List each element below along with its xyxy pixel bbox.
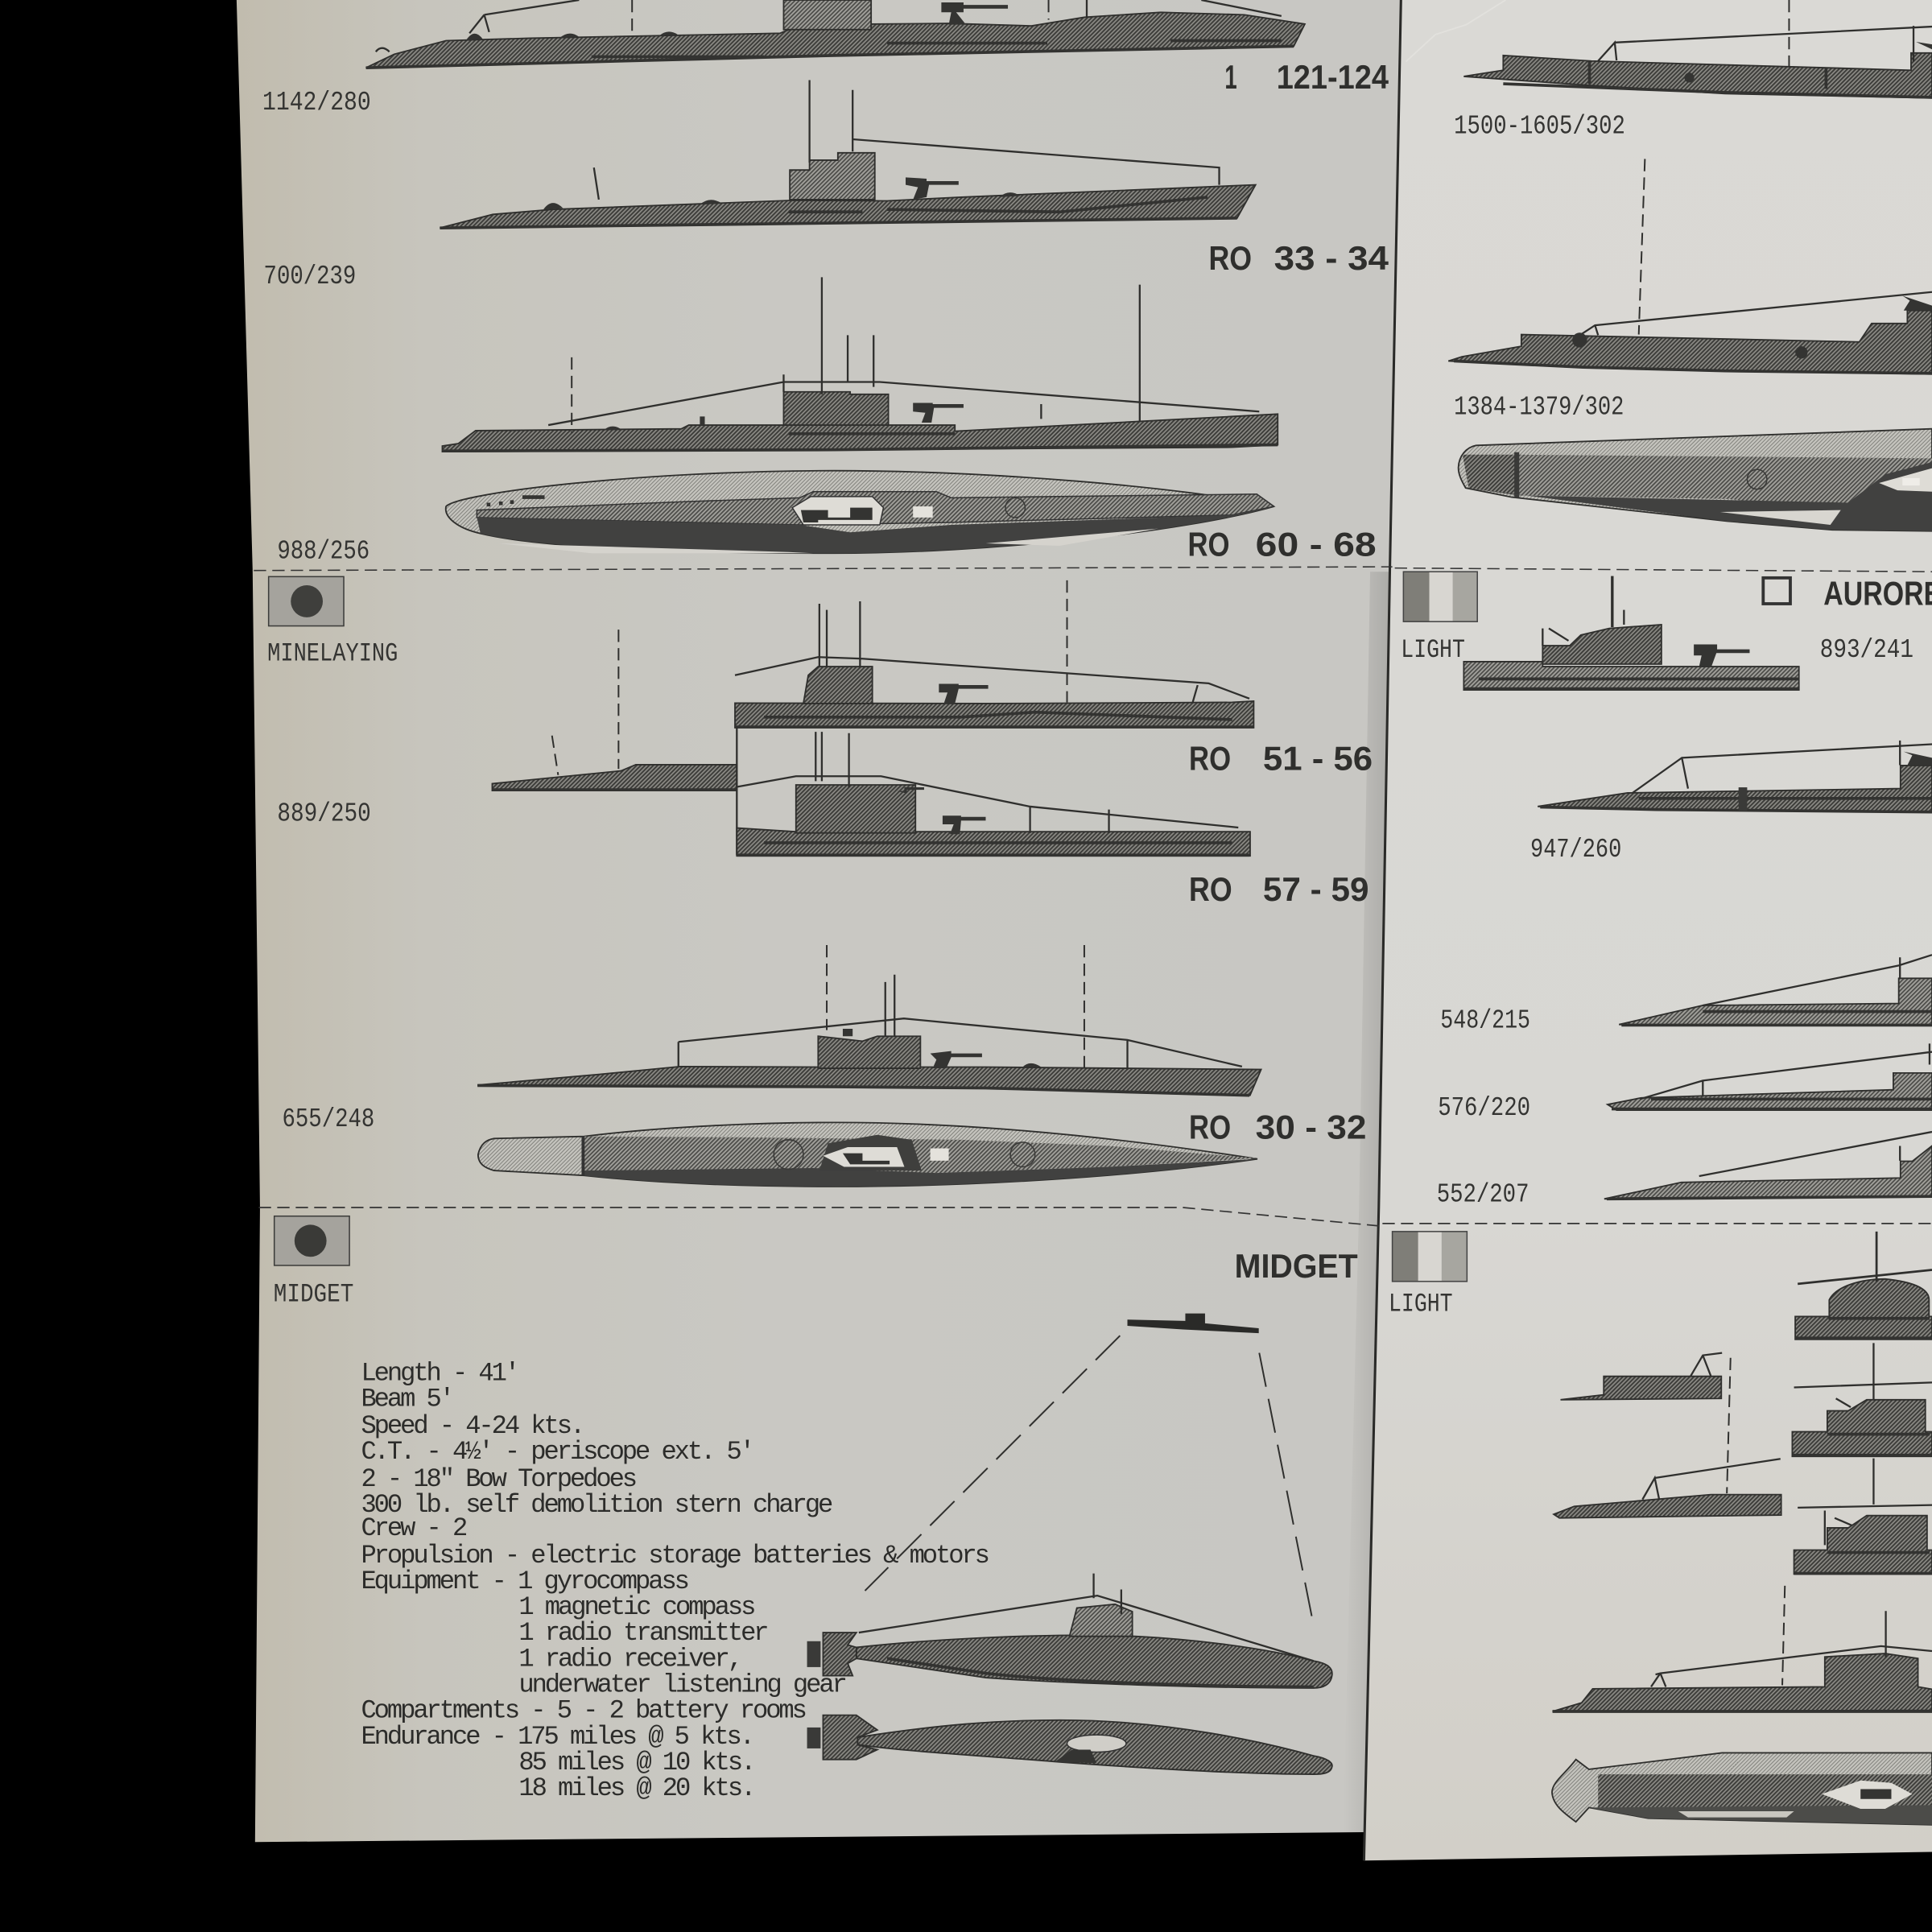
panel: minelaying xyxy=(267,576,1373,1187)
bow section B xyxy=(1554,1459,1781,1518)
bow section A xyxy=(1561,1353,1722,1400)
submarine: plan view xyxy=(1552,1752,1932,1825)
specification text block: 85 miles @ 10 kts. xyxy=(518,1748,753,1777)
specification text block: 300 lb. self demolition stern charge xyxy=(361,1490,832,1520)
class name: RO 57-59 xyxy=(1189,871,1369,908)
specification text block xyxy=(361,1358,989,1803)
class name: RO 30-32: RO xyxy=(1189,1108,1231,1146)
submarine: RO 33-34 xyxy=(440,80,1256,228)
class name: RO 30-32: 30 - 32 xyxy=(1256,1108,1366,1146)
submarine: RO 51-56 xyxy=(492,580,1253,855)
class name: RO 60-68 xyxy=(1188,526,1377,563)
specification text block: Endurance - 175 miles @ 5 kts. xyxy=(361,1722,753,1752)
class name: RO 57-59: 57 - 59 xyxy=(1263,871,1369,908)
tonnage: 893/241: 893/241 xyxy=(1820,635,1913,666)
class name: RO 51-56: 51 - 56 xyxy=(1263,741,1373,778)
marker: nationality symbol, neutral block xyxy=(1763,578,1790,604)
specification text block: underwater listening gear xyxy=(518,1670,846,1700)
specification text block: Propulsion - electric storage batteries & motors xyxy=(361,1541,989,1571)
specification text block: Equipment - 1 gyrocompass xyxy=(361,1567,688,1596)
submarine: RO 60-68 plan view xyxy=(446,471,1274,553)
submarine: 552/207 xyxy=(1604,1132,1932,1199)
class name: I 121-124 xyxy=(1224,59,1389,96)
submarine: RO 30-32 side view xyxy=(477,945,1261,1096)
heading: midget: MIDGET xyxy=(1235,1248,1358,1285)
submarine: RO 30-32 plan view xyxy=(478,1122,1257,1187)
class name: RO 60-68: RO xyxy=(1188,526,1230,563)
panel: light submarines, lower xyxy=(1389,1232,1932,1825)
category label: light: LIGHT xyxy=(1389,1290,1453,1319)
tonnage: 1500-1605/302: 1500-1605/302 xyxy=(1454,111,1625,142)
class name: RO 60-68: 60 - 68 xyxy=(1256,526,1377,563)
panel: paper left column xyxy=(237,0,1401,1842)
panel: light submarines, Italian xyxy=(1401,572,1932,1210)
fold dashed horizontal upper xyxy=(254,567,1932,572)
submarine: variant two xyxy=(1792,1343,1932,1456)
tonnage: 889/250: 889/250 xyxy=(277,799,371,829)
specification text block: Speed - 4-24 kts. xyxy=(361,1411,583,1441)
specification text block: Crew - 2 xyxy=(361,1513,466,1543)
submarine: variant one xyxy=(1795,1232,1932,1340)
tonnage: 1384-1379/302: 1384-1379/302 xyxy=(1454,392,1624,423)
submarine: RO 60-68 side view xyxy=(442,277,1278,452)
panel: midget xyxy=(274,1216,1358,1803)
panel: Japanese large submarines xyxy=(262,0,1389,567)
submarine: midget scale silhouette xyxy=(1128,1314,1259,1333)
submarine: midget side view xyxy=(807,1574,1332,1688)
tonnage: 552/207: 552/207 xyxy=(1437,1179,1529,1210)
flag: Italy xyxy=(1393,1232,1467,1282)
panel: paper right column xyxy=(1364,0,1932,1860)
class name: RO 30-32 xyxy=(1189,1108,1366,1146)
submarine: 947/260 xyxy=(1538,741,1932,812)
class name: I 121-124: 121-124 xyxy=(1277,59,1389,96)
flag: Italy xyxy=(1403,572,1477,621)
specification text block: 1 magnetic compass xyxy=(518,1592,754,1622)
fold dashed horizontal lower xyxy=(258,1208,1932,1226)
submarine: I 121-124 xyxy=(366,0,1305,68)
class name: RO 51-56: RO xyxy=(1189,741,1231,778)
submarine: plan view xyxy=(1459,429,1932,531)
tonnage: 655/248: 655/248 xyxy=(283,1104,374,1135)
panel: top right submarines xyxy=(1448,0,1932,531)
submarine: RO 57-59 xyxy=(737,732,1250,856)
submarine: 1500-1605 class xyxy=(1463,0,1932,98)
submarine: Aurore detail xyxy=(1463,576,1799,690)
submarine: 1384-1379 class side view xyxy=(1448,159,1932,374)
class name: I 121-124: 1 xyxy=(1224,59,1237,96)
tonnage: 947/260: 947/260 xyxy=(1530,835,1621,865)
specification text block: 18 miles @ 20 kts. xyxy=(518,1773,753,1803)
category label: light: LIGHT xyxy=(1401,635,1465,665)
specification text block: Length - 41' xyxy=(361,1358,518,1388)
flag: Japan xyxy=(275,1216,349,1265)
class name: RO 33-34: 33 - 34 xyxy=(1274,240,1389,277)
fold divider vertical xyxy=(1364,0,1401,1860)
class name: RO 33-34: RO xyxy=(1209,240,1252,277)
submarine: 576/220 xyxy=(1608,1043,1932,1110)
submarine: midget plan view xyxy=(807,1715,1332,1774)
class name: RO 33-34 xyxy=(1209,240,1389,277)
submarine: variant three xyxy=(1794,1459,1932,1574)
category label: minelaying: MINELAYING xyxy=(267,638,398,668)
specification text block: C.T. - 4½' - periscope ext. 5' xyxy=(361,1437,753,1467)
category label: midget: MIDGET xyxy=(274,1279,353,1309)
tonnage: 988/256: 988/256 xyxy=(277,536,369,567)
class name: RO 51-56 xyxy=(1189,741,1373,778)
specification text block: Beam 5' xyxy=(361,1384,452,1414)
flag: Japan xyxy=(269,576,344,626)
tonnage: 576/220: 576/220 xyxy=(1438,1093,1530,1124)
specification text block: 1 radio transmitter xyxy=(518,1618,767,1648)
specification text block: Compartments - 5 - 2 battery rooms xyxy=(361,1696,806,1726)
tonnage: 1142/280: 1142/280 xyxy=(262,88,371,118)
tonnage: 548/215: 548/215 xyxy=(1440,1006,1530,1037)
specification text block: 1 radio receiver, xyxy=(518,1644,741,1674)
submarine: 548/215 xyxy=(1619,955,1932,1026)
class name: RO 57-59: RO xyxy=(1189,871,1232,908)
submarine: side view xyxy=(1553,1586,1932,1711)
projection dashed lines xyxy=(865,1335,1311,1616)
specification text block: 2 - 18" Bow Torpedoes xyxy=(361,1464,636,1494)
tonnage: 700/239: 700/239 xyxy=(264,262,356,292)
section dashed line xyxy=(1727,1358,1731,1493)
